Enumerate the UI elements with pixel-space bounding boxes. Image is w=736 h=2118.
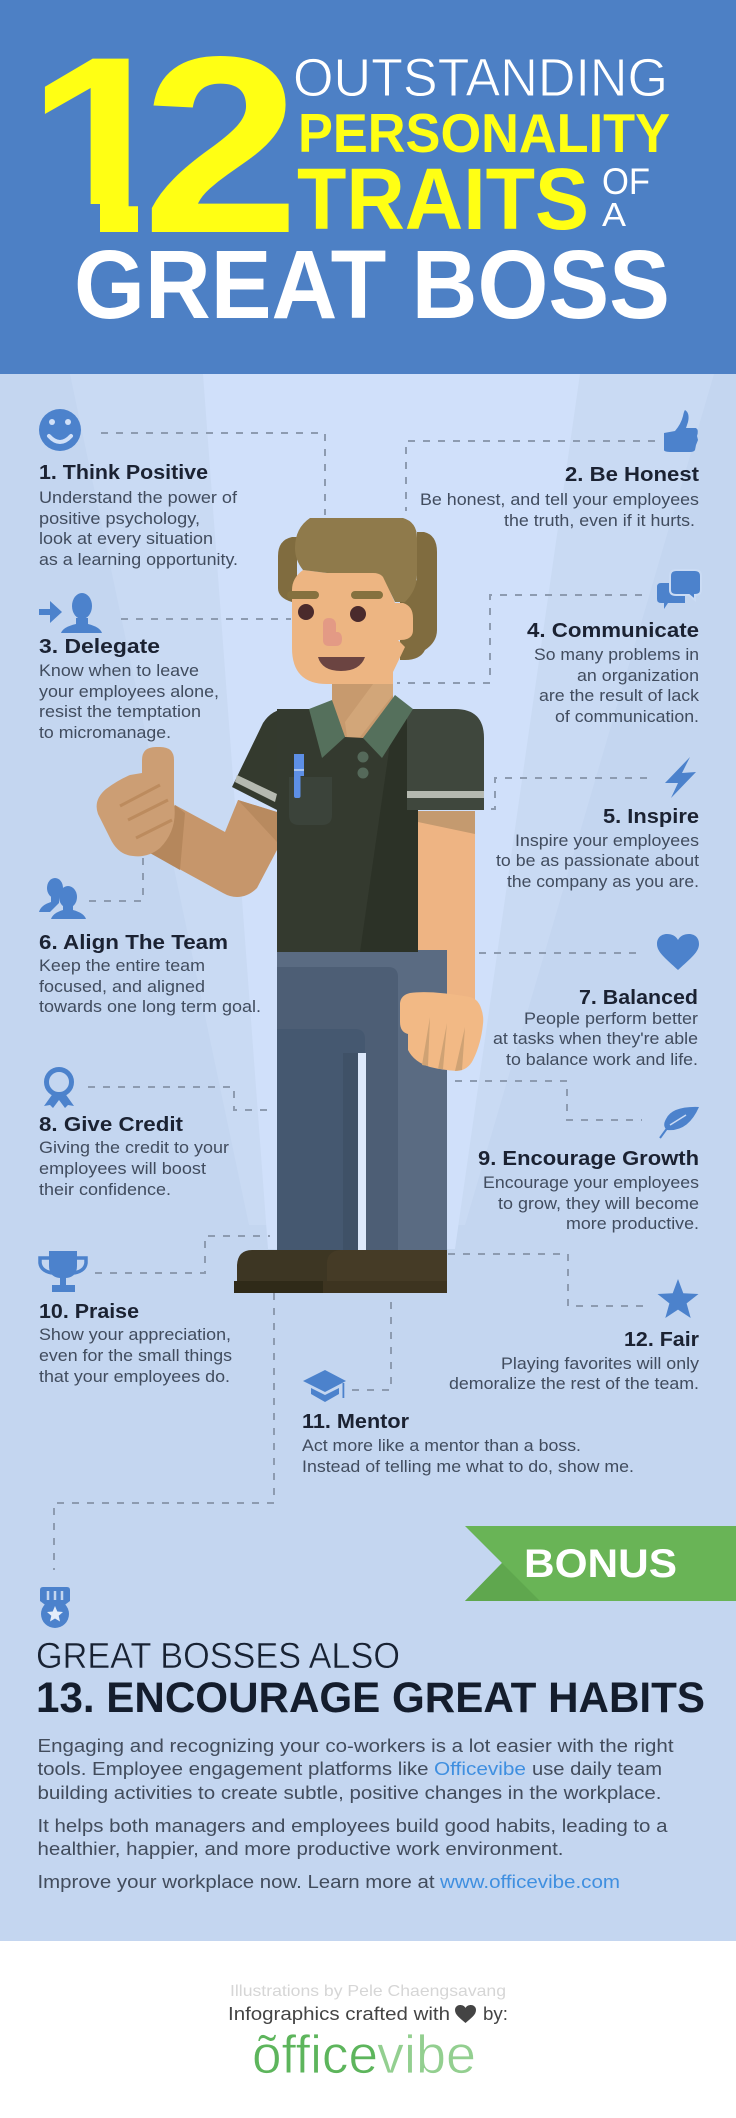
trait 1: think positive — [39, 409, 238, 569]
neck and collar — [309, 680, 413, 758]
description: their confidence. — [39, 1181, 171, 1199]
description: more productive. — [566, 1215, 699, 1233]
description — [493, 1010, 699, 1069]
paragraph 3: Improve your workplace now. Learn more at — [38, 1871, 434, 1892]
illustration: boss character — [97, 518, 484, 1293]
description: Instead of telling me what to do, show me. — [302, 1458, 634, 1476]
description: of communication. — [555, 708, 699, 726]
heading: 12. Fair — [624, 1329, 699, 1351]
left arm with thumbs up — [97, 747, 277, 897]
heading: 3. Delegate — [39, 636, 160, 658]
trait 12: fair — [449, 1279, 700, 1393]
panel: footer — [0, 1941, 736, 2118]
description — [39, 1139, 230, 1199]
description: at tasks when they're able — [493, 1030, 698, 1048]
trait 10: praise — [39, 1251, 232, 1386]
panel: light blue background — [0, 374, 736, 1941]
description: positive psychology, — [39, 510, 200, 528]
logo: officevibe — [252, 2025, 476, 2085]
heading: 10. Praise — [39, 1301, 139, 1323]
icon: heart — [657, 934, 699, 970]
title great boss: GREAT BOSS — [74, 230, 670, 339]
trait 4: communicate — [527, 570, 701, 726]
description — [39, 662, 219, 742]
description — [420, 491, 699, 530]
description: People perform better — [524, 1010, 699, 1028]
trousers — [277, 950, 447, 1250]
icon: ribbon — [44, 1070, 74, 1108]
title number 12: 2 — [142, 5, 300, 286]
description: look at every situation — [39, 530, 213, 548]
panel: bonus habit — [36, 1587, 705, 1892]
heading: encourage great habits: 13. ENCOURAGE GREAT HABITS — [36, 1674, 705, 1722]
title word a: A — [602, 196, 626, 233]
description: an organization — [577, 667, 699, 685]
title number 12 — [20, 5, 300, 286]
description — [449, 1355, 700, 1393]
paragraph 2: It helps both managers and employees build good habits, leading to a — [38, 1815, 668, 1836]
shoes — [234, 1250, 447, 1293]
head with hair and face — [278, 518, 437, 684]
paragraph 2 — [38, 1815, 668, 1859]
description: focused, and aligned — [39, 978, 205, 996]
title word personality: PERSONALITY — [298, 102, 670, 164]
paragraph 1: building activities to create subtle, positive changes in the workplace. — [38, 1782, 662, 1803]
description: to balance work and life. — [506, 1051, 698, 1069]
icon: smiley — [39, 409, 81, 451]
trait 6: align the team — [39, 878, 261, 1016]
icon: graduation cap — [303, 1370, 346, 1402]
crafted with line — [228, 2004, 508, 2024]
description: the company as you are. — [507, 873, 699, 891]
description: that your employees do. — [39, 1368, 230, 1386]
trait 7: balanced — [493, 934, 699, 1069]
icon: arrow and person — [39, 593, 102, 633]
description — [483, 1174, 699, 1233]
icon: trophy — [40, 1251, 86, 1292]
icon: leaf — [660, 1107, 699, 1138]
description: the truth, even if it hurts. — [504, 512, 695, 530]
title word of: OF — [602, 161, 650, 202]
title word traits: TRAITS — [297, 151, 589, 248]
description — [39, 957, 261, 1016]
description: towards one long term goal. — [39, 998, 261, 1016]
heading: 1. Think Positive — [39, 462, 208, 484]
title word outstanding: OUTSTANDING — [293, 48, 668, 108]
icon: medal — [40, 1587, 70, 1628]
description: Keep the entire team — [39, 957, 205, 975]
bonus label: BONUS — [524, 1542, 677, 1586]
description: So many problems in — [534, 646, 699, 664]
heading: 6. Align The Team — [39, 932, 228, 954]
description: Inspire your employees — [515, 832, 699, 850]
connector dashed lines — [54, 433, 655, 1570]
paragraph 1: Officevibe — [434, 1758, 526, 1779]
panel: header — [0, 0, 736, 374]
right fist — [400, 992, 483, 1071]
description — [534, 646, 700, 726]
illustration credit: Illustrations by Pele Chaengsavang — [230, 1983, 506, 2000]
description: as a learning opportunity. — [39, 551, 238, 569]
description — [39, 489, 238, 569]
paragraph 1: tools. Employee engagement platforms like — [38, 1758, 428, 1779]
description — [496, 832, 699, 891]
icon: speech bubbles — [657, 570, 701, 609]
icon: lightning bolt — [665, 757, 696, 798]
description: Understand the power of — [39, 489, 237, 507]
paragraph 3 — [38, 1871, 620, 1892]
description: to be as passionate about — [496, 852, 699, 870]
icon: star — [658, 1279, 698, 1318]
description: to micromanage. — [39, 724, 171, 742]
crafted with line: by: — [483, 2004, 508, 2024]
trait 9: encourage growth — [478, 1107, 699, 1233]
description: your employees alone, — [39, 683, 219, 701]
description: even for the small things — [39, 1347, 232, 1365]
paragraph 1: use daily team — [532, 1758, 662, 1779]
description: Encourage your employees — [483, 1174, 699, 1192]
shirt — [232, 709, 484, 952]
description: Act more like a mentor than a boss. — [302, 1437, 581, 1455]
heading: 4. Communicate — [527, 620, 699, 642]
crafted with line: Infographics crafted with — [228, 2004, 450, 2024]
trait 11: mentor — [302, 1370, 634, 1476]
description: Playing favorites will only — [501, 1355, 700, 1373]
description: Show your appreciation, — [39, 1326, 231, 1344]
logo: officevibe: õffice — [252, 2025, 378, 2085]
heading: 5. Inspire — [603, 806, 699, 828]
description: Be honest, and tell your employees — [420, 491, 699, 509]
description: resist the temptation — [39, 703, 201, 721]
right arm — [418, 811, 475, 1001]
trait 3: delegate — [39, 593, 219, 742]
heading: 8. Give Credit — [39, 1114, 183, 1136]
logo: officevibe: vibe — [377, 2025, 476, 2085]
icon: team — [39, 878, 86, 919]
description: demoralize the rest of the team. — [449, 1375, 699, 1393]
description: are the result of lack — [539, 687, 700, 705]
heading: 9. Encourage Growth — [478, 1148, 699, 1170]
heading: 11. Mentor — [302, 1411, 409, 1433]
trait 8: give credit — [39, 1070, 230, 1199]
trait 5: inspire — [496, 757, 699, 891]
paragraph 1 — [38, 1735, 674, 1803]
bonus ribbon — [465, 1526, 736, 1601]
icon: thumbs up — [664, 410, 698, 452]
paragraph 1: Engaging and recognizing your co-workers is a lot easier with the right — [38, 1735, 674, 1756]
description: employees will boost — [39, 1160, 206, 1178]
heading: great bosses also: GREAT BOSSES ALSO — [36, 1635, 400, 1676]
description: Know when to leave — [39, 662, 199, 680]
title number 12: 1 — [26, 5, 180, 286]
paragraph 3: www.officevibe.com — [439, 1871, 620, 1892]
trait 2: be honest — [420, 410, 699, 530]
description — [302, 1437, 634, 1476]
heading: 7. Balanced — [579, 987, 698, 1009]
description — [39, 1326, 232, 1386]
paragraph 2: healthier, happier, and more productive work environment. — [38, 1838, 564, 1859]
heading: 2. Be Honest — [565, 464, 699, 486]
description: Giving the credit to your — [39, 1139, 230, 1157]
description: to grow, they will become — [498, 1195, 699, 1213]
